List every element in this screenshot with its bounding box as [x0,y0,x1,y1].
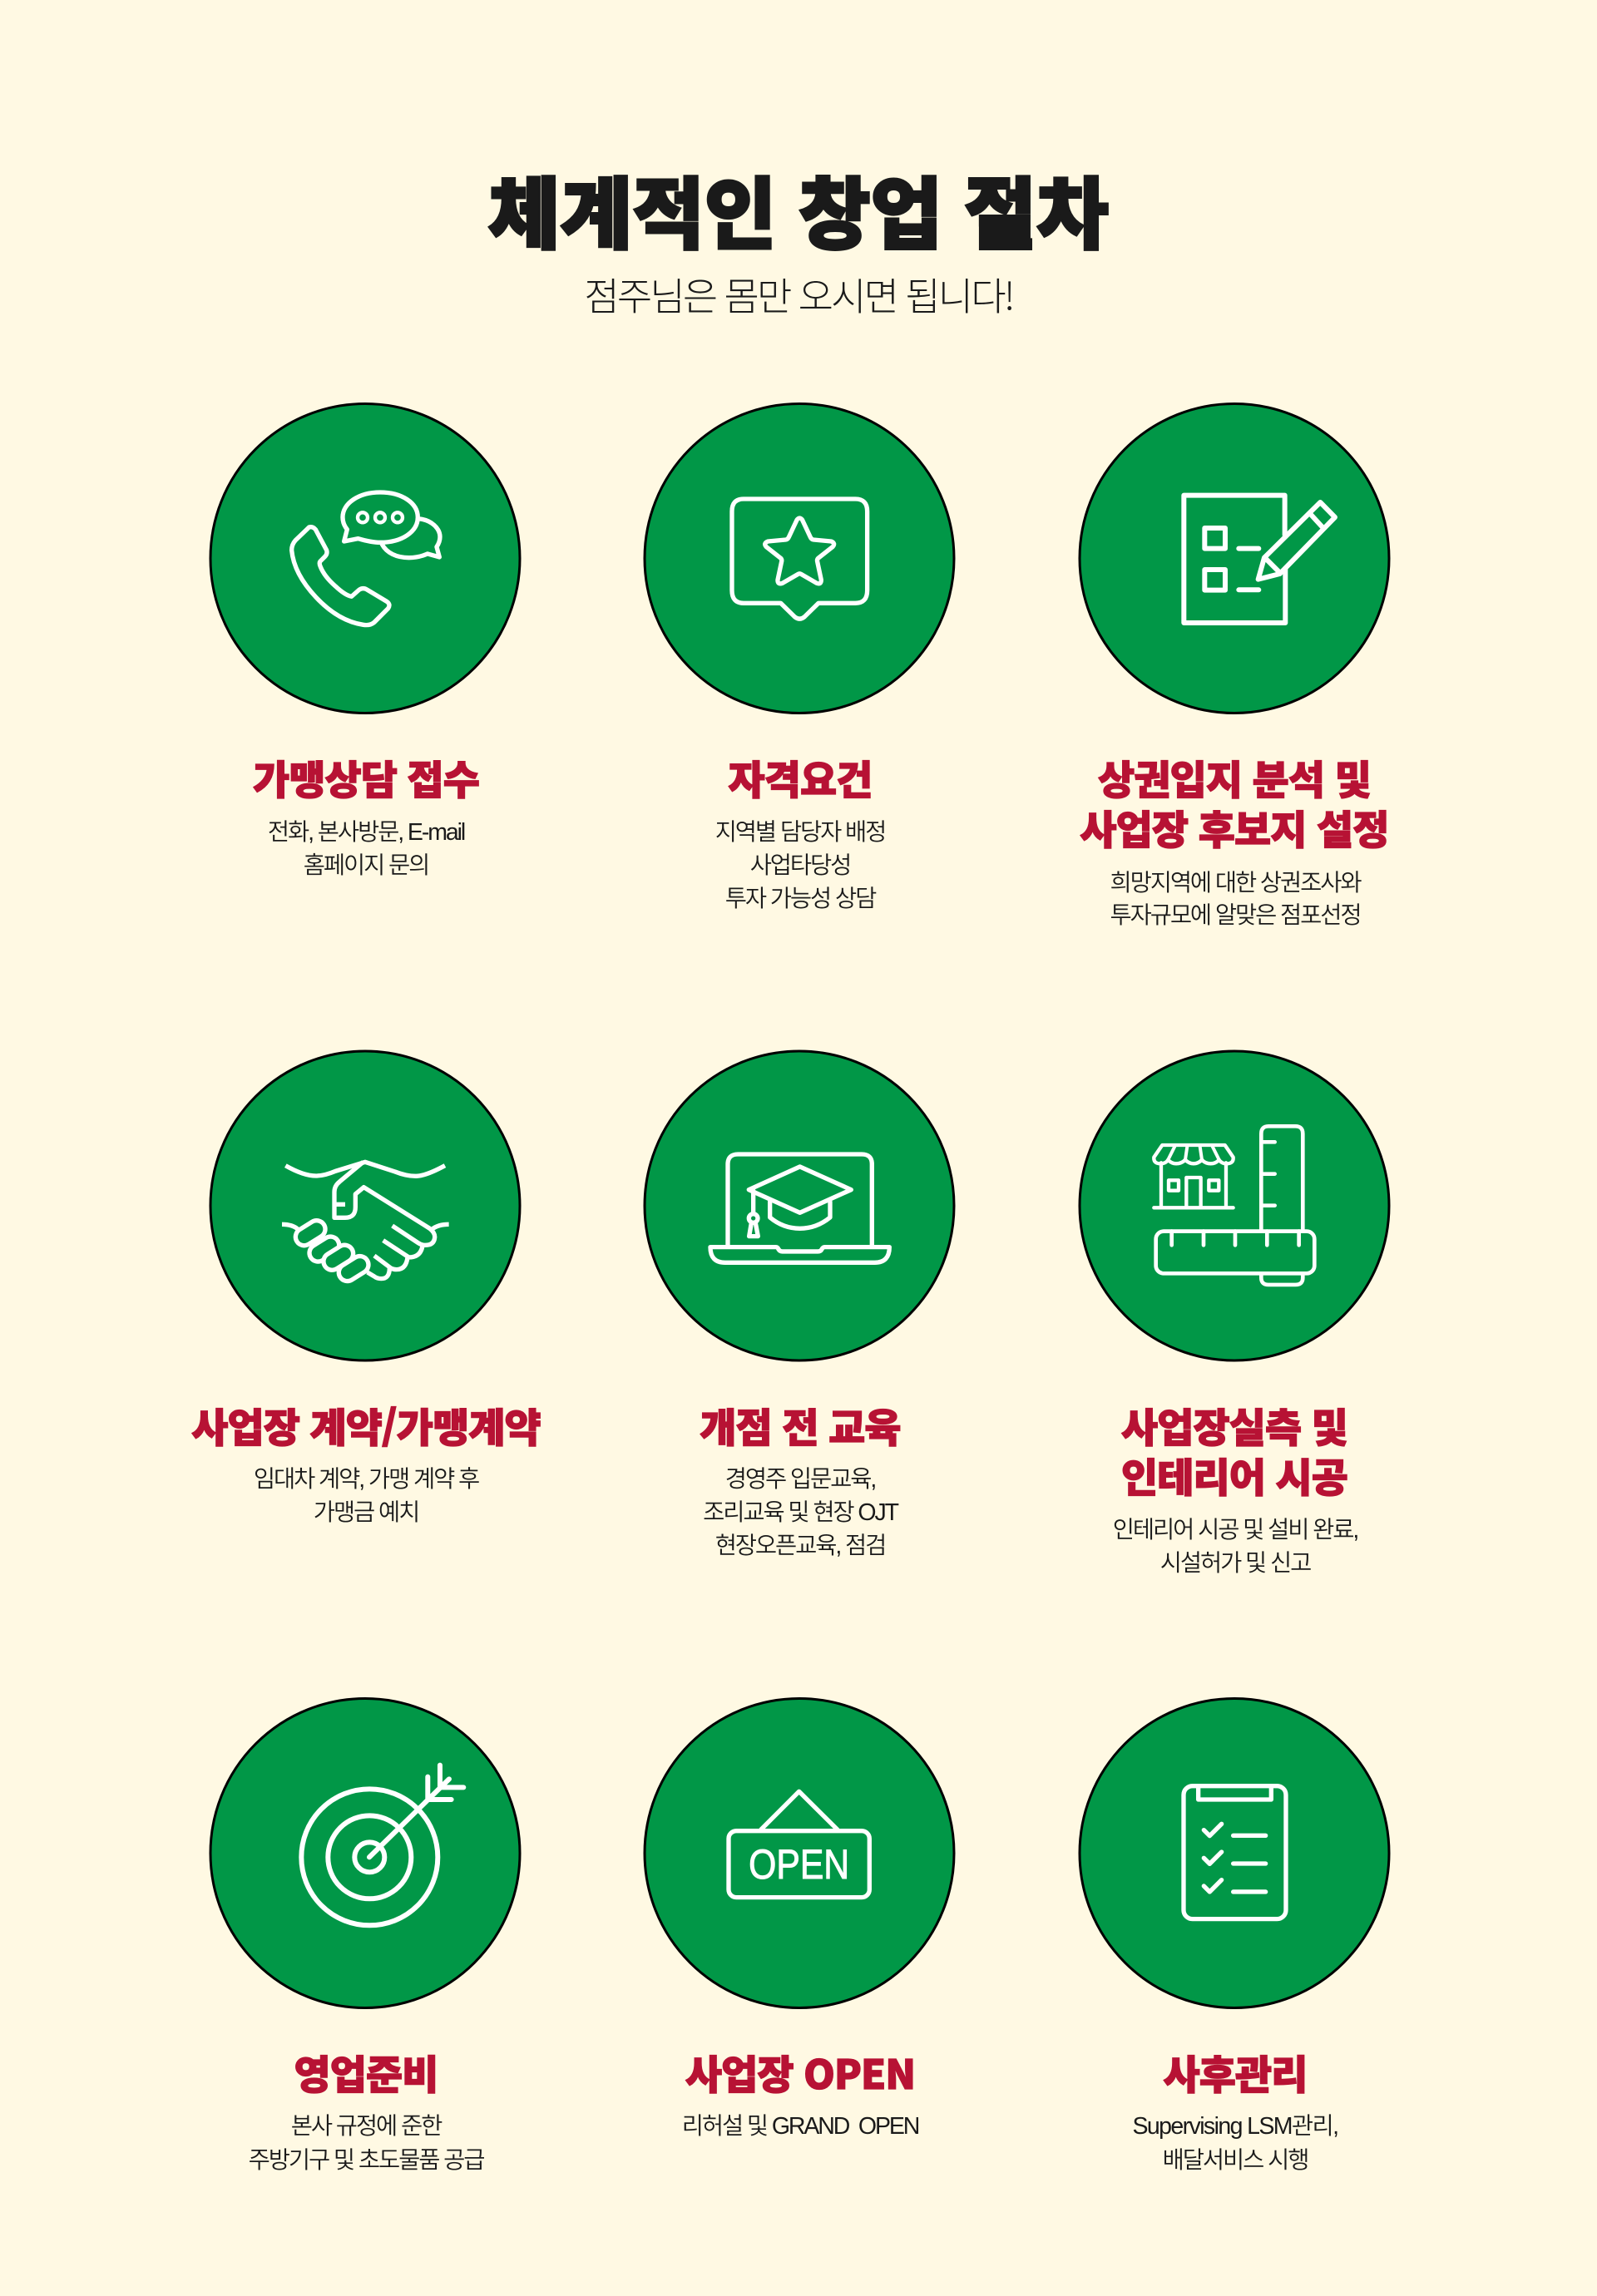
description: 가맹금 예치 [314,1499,418,1526]
panel: step 3 location analysis [1080,404,1389,929]
description: 사업타당성 [750,852,850,879]
description: 전화, 본사방문, E-mail [268,819,465,846]
icon: open sign [729,1791,869,1898]
circle badge [1080,1051,1389,1360]
circle badge [1080,404,1389,713]
circle badge [645,1051,954,1360]
heading: 상권입지 분석 및 [1098,748,1371,806]
panel: step 1 consultation [210,404,520,879]
description: 현장오픈교육, 점검 [715,1533,885,1559]
circle badge [645,404,954,713]
icon: handshake [282,1162,449,1284]
subtitle: 점주님은 몸만 오시면 됩니다! [584,267,1013,322]
description: 배달서비스 시행 [1163,2147,1308,2174]
heading: 영업준비 [294,2042,438,2101]
circle badge [210,1698,520,2007]
panel: step 6 site survey and interior [1080,1051,1389,1577]
heading: 가맹상담 접수 [253,748,479,806]
heading: 사업장 계약/가맹계약 [191,1395,541,1454]
description: 홈페이지 문의 [304,852,428,879]
description: 임대차 계약, 가맹 계약 후 [254,1466,479,1493]
description: 시설허가 및 신고 [1160,1550,1311,1577]
icon: target with arrow [301,1765,463,1925]
heading: 사업장 OPEN [685,2042,915,2101]
icon: store and rulers [1154,1126,1314,1285]
heading: 자격요건 [728,748,873,806]
circle badge [1080,1698,1389,2007]
icon: checklist and pencil [1184,496,1335,623]
icon: clipboard checklist [1184,1786,1286,1919]
description: 희망지역에 대한 상권조사와 [1110,870,1362,896]
description: 조리교육 및 현장 OJT [703,1499,899,1526]
panel: step 5 pre-opening training [645,1051,954,1559]
panel: step 7 sales preparation [210,1698,520,2174]
description: 투자규모에 알맞은 점포선정 [1110,902,1361,929]
heading: 인테리어 시공 [1121,1445,1347,1504]
panel: step 8 grand open [645,1698,954,2140]
heading: 사업장실측 및 [1121,1395,1347,1454]
icon: phone and speech bubbles [292,492,440,625]
description: 인테리어 시공 및 설비 완료, [1113,1517,1357,1543]
description: 투자 가능성 상담 [725,886,877,912]
title: 체계적인 창업 절차 [488,171,1109,259]
description: Supervising LSM관리, [1133,2113,1337,2140]
heading: 사업장 후보지 설정 [1080,797,1389,856]
description: 리허설 및 GRAND OPEN [682,2113,919,2140]
heading: 사후관리 [1163,2042,1308,2101]
circle badge [210,1051,520,1360]
panel: step 4 contract [191,1051,541,1526]
description: 본사 규정에 준한 [291,2113,443,2140]
icon: laptop with graduation cap [710,1154,889,1262]
icon: open sign: OPEN [749,1841,849,1888]
circle badge [645,1698,954,2007]
description: 지역별 담당자 배정 [715,819,885,846]
icon: star speech bubble [732,499,868,619]
heading: 개점 전 교육 [700,1395,901,1454]
circle badge [210,404,520,713]
description: 경영주 입문교육, [725,1466,875,1493]
panel: step 2 qualifications [645,404,954,912]
description: 주방기구 및 초도물품 공급 [249,2147,484,2174]
panel: step 9 after-sales management [1080,1698,1389,2174]
